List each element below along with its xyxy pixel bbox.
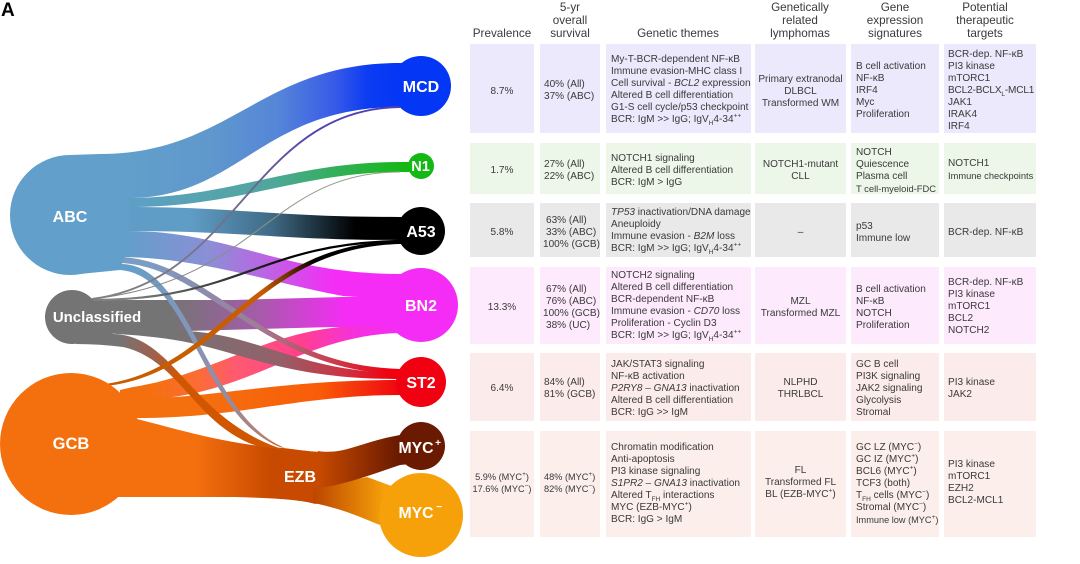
EZB gene expression: TCF3 (both) xyxy=(856,478,910,488)
node neck: Unclassified lower shoulder xyxy=(76,320,113,344)
node: GCB xyxy=(0,373,142,515)
EZB therapeutic targets: BCL2-MCL1 xyxy=(948,494,1003,506)
MCD genetic themes: Immune evasion-MHC class I xyxy=(611,66,742,76)
EZB therapeutic targets: mTORC1 xyxy=(948,470,990,482)
node: GCB: GCB xyxy=(53,435,89,453)
MCD genetic themes: G1-S cell cycle/p53 checkpoint xyxy=(611,102,748,112)
A53 survival: 63% (All) xyxy=(546,215,587,226)
MCD therapeutic targets: mTORC1 xyxy=(948,72,990,84)
BN2 gene expression: B cell activation xyxy=(856,284,926,294)
ST2 related lymphomas: THRLBCL xyxy=(778,389,823,400)
N1 genetic themes: Altered B cell differentiation xyxy=(611,164,733,176)
node label: EZB: EZB xyxy=(284,469,316,486)
BN2 survival: 76% (ABC) xyxy=(546,296,596,306)
BN2 therapeutic targets: mTORC1 xyxy=(948,300,990,312)
BN2 genetic themes: BCR-dependent NF-κB xyxy=(611,294,714,304)
N1 related lymphomas: NOTCH1-mutant xyxy=(763,158,838,170)
EZB prevalence: 5.9% (MYC+) xyxy=(475,471,529,482)
BN2 therapeutic targets: NOTCH2 xyxy=(948,324,989,336)
N1 gene expression: NOTCH xyxy=(856,146,892,158)
BN2 gene expression xyxy=(851,267,939,344)
BN2 survival: 67% (All) xyxy=(546,284,587,294)
column header: Potential therapeutic targets: targets xyxy=(967,27,1003,40)
EZB gene expression: GC IZ (MYC+) xyxy=(856,452,918,464)
ST2 survival xyxy=(540,353,600,421)
ST2 related lymphomas xyxy=(755,353,846,421)
ST2 therapeutic targets: JAK2 xyxy=(948,389,972,400)
node: Unclassified: Unclassified xyxy=(53,309,141,326)
MCD therapeutic targets: BCL2-BCLXL-MCL1 xyxy=(948,84,1034,98)
node: ST2: ST2 xyxy=(406,375,436,392)
BN2 therapeutic targets: PI3 kinase xyxy=(948,288,995,300)
BN2 therapeutic targets xyxy=(944,267,1036,344)
ST2 prevalence: 6.4% xyxy=(491,383,513,394)
BN2 related lymphomas xyxy=(755,267,846,344)
flow: Unclassified to A53 xyxy=(92,241,400,300)
A53 survival: 100% (GCB) xyxy=(543,239,600,250)
table row: ST2 xyxy=(470,353,1036,421)
A53 related lymphomas: – xyxy=(798,227,803,238)
EZB gene expression: Stromal (MYC−) xyxy=(856,500,926,512)
node: BN2 xyxy=(384,268,458,342)
A53 survival xyxy=(540,203,600,257)
node: ABC: ABC xyxy=(53,209,88,226)
column header: Genetically related lymphomas xyxy=(770,1,830,40)
EZB related lymphomas: FL xyxy=(795,464,806,476)
N1 therapeutic targets: Immune checkpoints xyxy=(948,170,1033,180)
N1 survival: 22% (ABC) xyxy=(544,170,594,182)
MCD related lymphomas xyxy=(755,44,846,133)
node: Unclassified xyxy=(45,290,141,344)
EZB therapeutic targets xyxy=(944,431,1036,537)
EZB related lymphomas: Transformed FL xyxy=(765,476,836,488)
MCD gene expression: NF-κB xyxy=(856,72,884,84)
flow: GCB to EZB xyxy=(70,415,333,504)
ST2 gene expression: Stromal xyxy=(856,407,891,418)
MCD survival xyxy=(540,44,600,133)
N1 prevalence: 1.7% xyxy=(491,164,513,176)
EZB genetic themes: PI3 kinase signaling xyxy=(611,466,700,476)
MCD survival: 37% (ABC) xyxy=(544,90,594,102)
column header: Potential therapeutic targets xyxy=(956,1,1014,40)
A53 genetic themes xyxy=(606,203,751,257)
ST2 gene expression: Glycolysis xyxy=(856,395,901,406)
BN2 gene expression: Proliferation xyxy=(856,320,910,330)
N1 survival xyxy=(540,143,600,194)
BN2 genetic themes: Proliferation - Cyclin D3 xyxy=(611,318,717,328)
column header: Potential therapeutic targets: therapeutic xyxy=(956,14,1014,27)
ST2 survival: 84% (All) xyxy=(544,377,585,388)
MCD genetic themes: My-T-BCR-dependent NF-κB xyxy=(611,54,740,64)
node: A53 xyxy=(397,207,445,255)
MCD genetic themes: Altered B cell differentiation xyxy=(611,90,733,100)
BN2 related lymphomas: Transformed MZL xyxy=(761,308,840,318)
ST2 genetic themes xyxy=(606,353,751,421)
panel label A: A xyxy=(1,0,15,21)
node: ST2 xyxy=(396,357,446,407)
EZB gene expression: Immune low (MYC+) xyxy=(856,513,938,524)
column header: 5-yr overall survival: overall xyxy=(553,14,587,27)
ST2 survival: 81% (GCB) xyxy=(544,389,595,400)
BN2 gene expression: NOTCH xyxy=(856,308,892,318)
flow: GCB to ST2 xyxy=(110,380,421,418)
column header: Gene expression signatures xyxy=(867,1,923,40)
N1 gene expression xyxy=(851,143,939,194)
N1 therapeutic targets xyxy=(944,143,1036,194)
N1 genetic themes: NOTCH1 signaling xyxy=(611,152,695,164)
table row: BN2 xyxy=(470,267,1036,344)
node: MCD xyxy=(391,56,451,116)
BN2 survival xyxy=(540,267,600,344)
node: N1: N1 xyxy=(411,159,430,175)
flow: ABC to EZB xyxy=(80,262,285,448)
flow: Unclassified to MCD xyxy=(92,107,400,299)
table row: EZB xyxy=(470,431,1036,537)
ST2 therapeutic targets: PI3 kinase xyxy=(948,377,995,388)
node: MYC minus: − xyxy=(436,502,442,513)
node: MYC plus: + xyxy=(435,438,441,449)
N1 survival: 27% (All) xyxy=(544,158,585,170)
table row: A53 xyxy=(470,203,1036,257)
A53 gene expression: p53 xyxy=(856,221,873,232)
column header: 5-yr overall survival: 5-yr xyxy=(560,1,580,14)
EZB gene expression: BCL6 (MYC+) xyxy=(856,464,917,476)
MCD genetic themes xyxy=(606,44,751,133)
N1 therapeutic targets: NOTCH1 xyxy=(948,158,989,168)
EZB gene expression: GC LZ (MYC−) xyxy=(856,440,921,452)
flow: ABC to N1 xyxy=(120,162,421,207)
EZB genetic themes: Altered TFH interactions xyxy=(611,490,714,502)
N1 related lymphomas xyxy=(755,143,846,194)
MCD gene expression xyxy=(851,44,939,133)
ST2 genetic themes: BCR: IgG >> IgM xyxy=(611,407,688,418)
ST2 genetic themes: JAK/STAT3 signaling xyxy=(611,359,704,370)
N1 related lymphomas: CLL xyxy=(791,170,810,182)
MCD related lymphomas: DLBCL xyxy=(784,86,817,96)
A53 genetic themes: TP53 inactivation/DNA damage xyxy=(611,207,751,218)
column header: Genetic themes: Genetic themes xyxy=(637,27,719,40)
BN2 therapeutic targets: BCR-dep. NF-κB xyxy=(948,276,1023,288)
flow: Unclassified to BN2 xyxy=(80,296,421,333)
A53 survival: 33% (ABC) xyxy=(546,227,596,238)
N1 gene expression: Plasma cell xyxy=(856,170,907,182)
EZB survival: 48% (MYC+) xyxy=(544,471,595,482)
A53 related lymphomas xyxy=(755,203,846,257)
ST2 gene expression: JAK2 signaling xyxy=(856,383,922,394)
flow: ABC to ST2 xyxy=(110,257,421,374)
EZB genetic themes xyxy=(606,431,751,537)
flow: ABC to A53 xyxy=(120,207,421,240)
node: N1 xyxy=(408,153,434,179)
EZB gene expression xyxy=(851,431,939,537)
MCD prevalence xyxy=(470,44,534,133)
ST2 related lymphomas: NLPHD xyxy=(783,377,818,388)
ST2 genetic themes: NF-κB activation xyxy=(611,371,685,382)
BN2 gene expression: NF-κB xyxy=(856,296,884,306)
column header: Prevalence: Prevalence xyxy=(473,27,531,40)
column header: Gene expression signatures: Gene xyxy=(881,1,909,14)
flow: EZB to MYC minus xyxy=(313,477,421,540)
A53 prevalence: 5.8% xyxy=(491,227,513,238)
ST2 prevalence xyxy=(470,353,534,421)
ST2 therapeutic targets xyxy=(944,353,1036,421)
A53 genetic themes: BCR: IgM >> IgG; IgVH4-34++ xyxy=(611,242,741,256)
flow: Unclassified to N1 xyxy=(92,172,400,299)
BN2 genetic themes xyxy=(606,267,751,344)
node: MCD: MCD xyxy=(403,79,439,96)
MCD gene expression: B cell activation xyxy=(856,60,926,72)
BN2 therapeutic targets: BCL2 xyxy=(948,312,973,324)
EZB prevalence xyxy=(470,431,534,537)
BN2 survival: 100% (GCB) xyxy=(543,308,600,318)
EZB survival: 82% (MYC−) xyxy=(544,483,595,494)
BN2 related lymphomas: MZL xyxy=(790,296,811,306)
ST2 gene expression: PI3K signaling xyxy=(856,371,920,382)
node: A53: A53 xyxy=(406,224,436,241)
MCD genetic themes: BCR: IgM >> IgG; IgVH4-34++ xyxy=(611,112,741,126)
MCD gene expression: Myc xyxy=(856,96,874,108)
EZB genetic themes: S1PR2 – GNA13 inactivation xyxy=(611,478,740,488)
A53 therapeutic targets xyxy=(944,203,1036,257)
table row: MCD xyxy=(470,44,1036,133)
BN2 genetic themes: NOTCH2 signaling xyxy=(611,270,695,280)
node: MYC plus: MYC xyxy=(398,440,434,457)
MCD related lymphomas: Primary extranodal xyxy=(758,74,843,84)
flow: Unclassified to ST2 xyxy=(100,331,421,379)
N1 gene expression: T cell-myeloid-FDC xyxy=(856,182,936,194)
column header: Potential therapeutic targets: Potential xyxy=(962,1,1008,14)
BN2 genetic themes: Immune evasion - CD70 loss xyxy=(611,306,740,316)
ST2 genetic themes: Altered B cell differentiation xyxy=(611,395,733,406)
node: BN2: BN2 xyxy=(405,298,437,315)
BN2 genetic themes: BCR: IgM >> IgG; IgVH4-34++ xyxy=(611,328,741,342)
column header: 5-yr overall survival xyxy=(550,1,590,40)
A53 genetic themes: Immune evasion - B2M loss xyxy=(611,231,735,242)
EZB prevalence: 17.6% (MYC−) xyxy=(473,483,531,494)
N1 gene expression: Quiescence xyxy=(856,158,909,170)
flow: EZB to MYC plus xyxy=(313,432,421,489)
column header: Genetically related lymphomas: related xyxy=(782,14,818,27)
EZB related lymphomas xyxy=(755,431,846,537)
MCD prevalence: 8.7% xyxy=(491,86,513,96)
A53 gene expression: Immune low xyxy=(856,233,910,244)
MCD gene expression: Proliferation xyxy=(856,108,910,120)
A53 therapeutic targets: BCR-dep. NF-κB xyxy=(948,227,1023,238)
BN2 prevalence: 13.3% xyxy=(488,302,516,312)
EZB genetic themes: BCR: IgG > IgM xyxy=(611,514,682,524)
flow: Unclassified to EZB xyxy=(76,330,285,450)
EZB genetic themes: MYC (EZB-MYC+) xyxy=(611,500,692,512)
A53 gene expression xyxy=(851,203,939,257)
MCD genetic themes: Cell survival - BCL2 expression xyxy=(611,78,751,88)
column header: Genetically related lymphomas: Genetically xyxy=(771,1,829,14)
node: MYC minus: MYC xyxy=(398,505,434,522)
BN2 survival: 38% (UC) xyxy=(546,320,590,330)
MCD therapeutic targets: JAK1 xyxy=(948,96,972,108)
A53 prevalence xyxy=(470,203,534,257)
EZB therapeutic targets: EZH2 xyxy=(948,482,974,494)
flow: GCB to A53 xyxy=(105,241,421,386)
column header: Gene expression signatures: expression xyxy=(867,14,923,27)
column header: 5-yr overall survival: survival xyxy=(550,27,590,40)
column header: Gene expression signatures: signatures xyxy=(868,27,922,40)
MCD related lymphomas: Transformed WM xyxy=(762,98,839,108)
MCD gene expression: IRF4 xyxy=(856,84,878,96)
EZB genetic themes: Chromatin modification xyxy=(611,442,714,452)
node: ABC xyxy=(10,155,130,275)
MCD therapeutic targets: IRAK4 xyxy=(948,108,977,120)
flow: ABC to BN2 xyxy=(110,231,421,298)
N1 genetic themes: BCR: IgM > IgG xyxy=(611,176,682,188)
flow: ABC to MCD xyxy=(70,63,421,200)
ST2 gene expression xyxy=(851,353,939,421)
N1 prevalence xyxy=(470,143,534,194)
EZB survival xyxy=(540,431,600,537)
ST2 gene expression: GC B cell xyxy=(856,359,898,370)
EZB gene expression: TFH cells (MYC−) xyxy=(856,488,929,502)
MCD therapeutic targets: PI3 kinase xyxy=(948,60,995,72)
MCD therapeutic targets xyxy=(944,44,1036,133)
ST2 genetic themes: P2RY8 – GNA13 inactivation xyxy=(611,383,740,394)
MCD therapeutic targets: BCR-dep. NF-κB xyxy=(948,48,1023,60)
MCD therapeutic targets: IRF4 xyxy=(948,120,970,132)
EZB genetic themes: Anti-apoptosis xyxy=(611,454,675,464)
EZB therapeutic targets: PI3 kinase xyxy=(948,458,995,470)
BN2 prevalence xyxy=(470,267,534,344)
column header: Genetically related lymphomas: lymphomas xyxy=(770,27,830,40)
EZB related lymphomas: BL (EZB-MYC+) xyxy=(765,487,836,500)
node neck: ABC lower shoulder xyxy=(80,240,125,274)
MCD survival: 40% (All) xyxy=(544,78,585,90)
flow: GCB to BN2 xyxy=(120,322,421,405)
A53 genetic themes: Aneuploidy xyxy=(611,219,661,230)
node: MYC plus xyxy=(397,422,445,470)
table row: N1 xyxy=(470,143,1036,194)
BN2 genetic themes: Altered B cell differentiation xyxy=(611,282,733,292)
sankey diagram: lymphoma subtype flows xyxy=(0,56,463,557)
N1 genetic themes xyxy=(606,143,751,194)
node: MYC minus xyxy=(379,473,463,557)
